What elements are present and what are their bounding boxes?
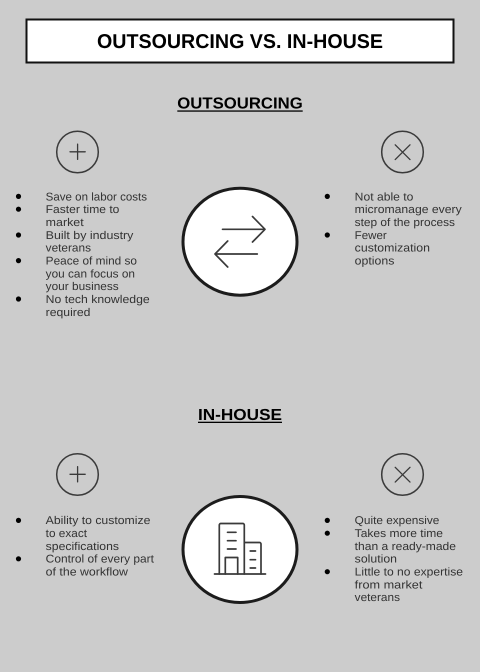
list: outsourcing cons: step of the process xyxy=(355,217,455,229)
list: outsourcing pros: Peace of mind so xyxy=(46,256,137,268)
panel: outsourcing xyxy=(16,96,462,319)
title banner: OUTSOURCING VS. IN-HOUSE xyxy=(97,31,383,53)
list: in-house cons: veterans xyxy=(355,592,400,604)
panel: in-house xyxy=(16,407,463,604)
title banner xyxy=(26,20,454,62)
list: in-house pros xyxy=(16,515,155,578)
list: in-house cons xyxy=(325,515,463,604)
heading: in-house: IN-HOUSE xyxy=(198,407,282,424)
list: in-house pros: Control of every part xyxy=(46,554,155,566)
list: outsourcing cons: Fewer xyxy=(355,230,387,242)
list: outsourcing pros: Faster time to xyxy=(46,204,119,216)
list: outsourcing pros: you can focus on xyxy=(46,268,135,280)
list: outsourcing cons: Not able to xyxy=(355,191,413,203)
list: in-house pros: to exact xyxy=(46,528,88,540)
icon: cross in circle xyxy=(382,131,423,173)
icon: plus in circle xyxy=(57,131,98,173)
list: outsourcing pros: required xyxy=(46,307,90,319)
list: in-house cons: Takes more time xyxy=(355,528,443,540)
list: in-house pros: of the workflow xyxy=(46,566,129,578)
list: outsourcing cons: options xyxy=(355,256,395,268)
list: outsourcing pros xyxy=(16,191,150,319)
icon: plus in circle xyxy=(57,454,98,495)
icon: cross in circle xyxy=(382,454,423,495)
list: in-house pros: Ability to customize xyxy=(46,515,150,527)
list: outsourcing cons: customization xyxy=(355,243,430,255)
heading: outsourcing: OUTSOURCING xyxy=(177,96,303,113)
icon: swap arrows in circle xyxy=(183,188,297,295)
list: outsourcing cons: micromanage every xyxy=(355,204,462,216)
list: in-house cons: solution xyxy=(355,554,397,566)
list: outsourcing pros: Built by industry xyxy=(46,230,134,242)
list: in-house cons: from market xyxy=(355,579,423,591)
list: outsourcing pros: market xyxy=(46,217,85,229)
list: outsourcing pros: your business xyxy=(46,281,119,293)
list: outsourcing pros: No tech knowledge xyxy=(46,294,150,306)
list: in-house cons: than a ready-made xyxy=(355,541,456,553)
list: in-house pros: specifications xyxy=(46,541,119,553)
list: outsourcing pros: Save on labor costs xyxy=(46,191,147,203)
list: in-house cons: Quite expensive xyxy=(355,515,439,527)
icon: office buildings in circle xyxy=(183,496,297,602)
list: outsourcing pros: veterans xyxy=(46,243,91,255)
list: outsourcing cons xyxy=(325,191,462,268)
list: in-house cons: Little to no expertise xyxy=(355,566,463,578)
